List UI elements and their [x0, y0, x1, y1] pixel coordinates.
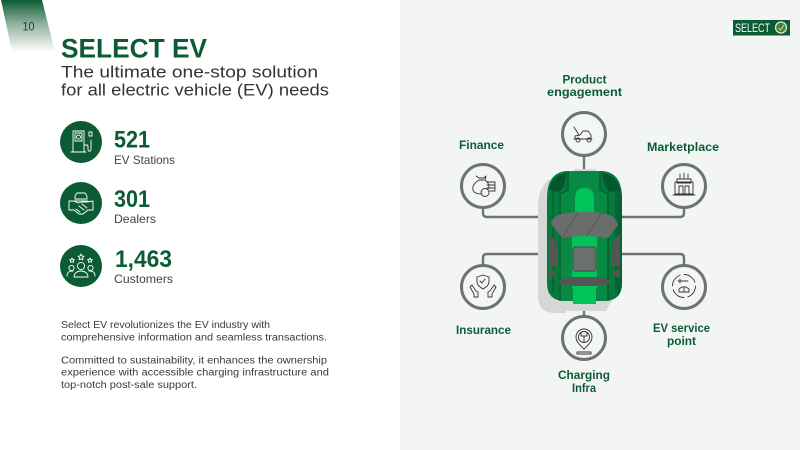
node label: Charging [558, 368, 610, 382]
stat: customers [60, 245, 173, 287]
stat: dealers [60, 182, 156, 226]
logo: SELECT [733, 20, 790, 36]
description text: comprehensive information and seamless transactions. [61, 332, 327, 344]
logo: SELECT: SELECT [735, 23, 770, 35]
car shadow [538, 180, 612, 313]
connector lines [483, 156, 684, 316]
icon ring [462, 164, 504, 208]
hood stripe [575, 188, 594, 212]
node label [547, 72, 622, 99]
title: SELECT EV [61, 34, 207, 64]
stat value: 521 [114, 126, 150, 154]
body panel lighter [561, 171, 607, 301]
node label: engagement [547, 85, 622, 99]
right edge shade [617, 186, 622, 297]
panel: right background [400, 0, 800, 450]
subtitle [61, 62, 329, 100]
description text [61, 320, 329, 391]
page number tab: 10 [22, 22, 34, 34]
icon ring [562, 316, 606, 360]
icon ring [662, 164, 706, 208]
icon ring [662, 266, 706, 308]
node label: point [667, 334, 696, 348]
node label [653, 321, 710, 348]
node label: Infra [572, 381, 596, 395]
icon: people and stars [60, 245, 102, 287]
stat value: 1,463 [115, 246, 172, 273]
node label: Insurance [456, 323, 511, 337]
subtitle: for all electric vehicle (EV) needs [61, 80, 329, 100]
description text: Committed to sustainability, it enhances the ownership [61, 356, 327, 366]
sunroof [573, 247, 596, 271]
node label: Product [562, 72, 606, 86]
node: product engagement [547, 72, 622, 156]
icon: car and handshake [60, 182, 102, 224]
stat caption: EV Stations [114, 153, 175, 167]
node: charging infra [558, 316, 610, 395]
stat caption: Customers [114, 272, 173, 286]
node: marketplace [647, 140, 719, 208]
rear stripe [573, 287, 596, 304]
icon: charging station [60, 121, 102, 163]
node label: EV service [653, 321, 710, 335]
stat caption: Dealers [114, 212, 156, 226]
node label [558, 368, 610, 395]
body stripes [553, 171, 616, 301]
subtitle: The ultimate one-stop solution [61, 62, 318, 82]
node: finance [459, 138, 504, 208]
icon ring [462, 266, 504, 308]
node label: Marketplace [647, 140, 719, 154]
icon ring [562, 112, 606, 156]
stat value: 301 [114, 186, 150, 213]
description text: experience with accessible charging infrastructure and [61, 368, 329, 378]
node: insurance [456, 266, 511, 337]
car body [547, 171, 622, 301]
stat: EV stations [60, 121, 175, 167]
page number tab [1, 0, 55, 52]
description text: Select EV revolutionizes the EV industry with [61, 320, 270, 331]
description text: top-notch post-sale support. [61, 380, 197, 391]
front wheel arches [549, 173, 566, 192]
windshield [551, 212, 618, 238]
roof stripe [572, 236, 597, 288]
rear window [557, 277, 611, 286]
side windows [549, 234, 558, 267]
car illustration [538, 169, 622, 313]
node: EV service point [653, 266, 710, 348]
node label: Finance [459, 138, 504, 152]
